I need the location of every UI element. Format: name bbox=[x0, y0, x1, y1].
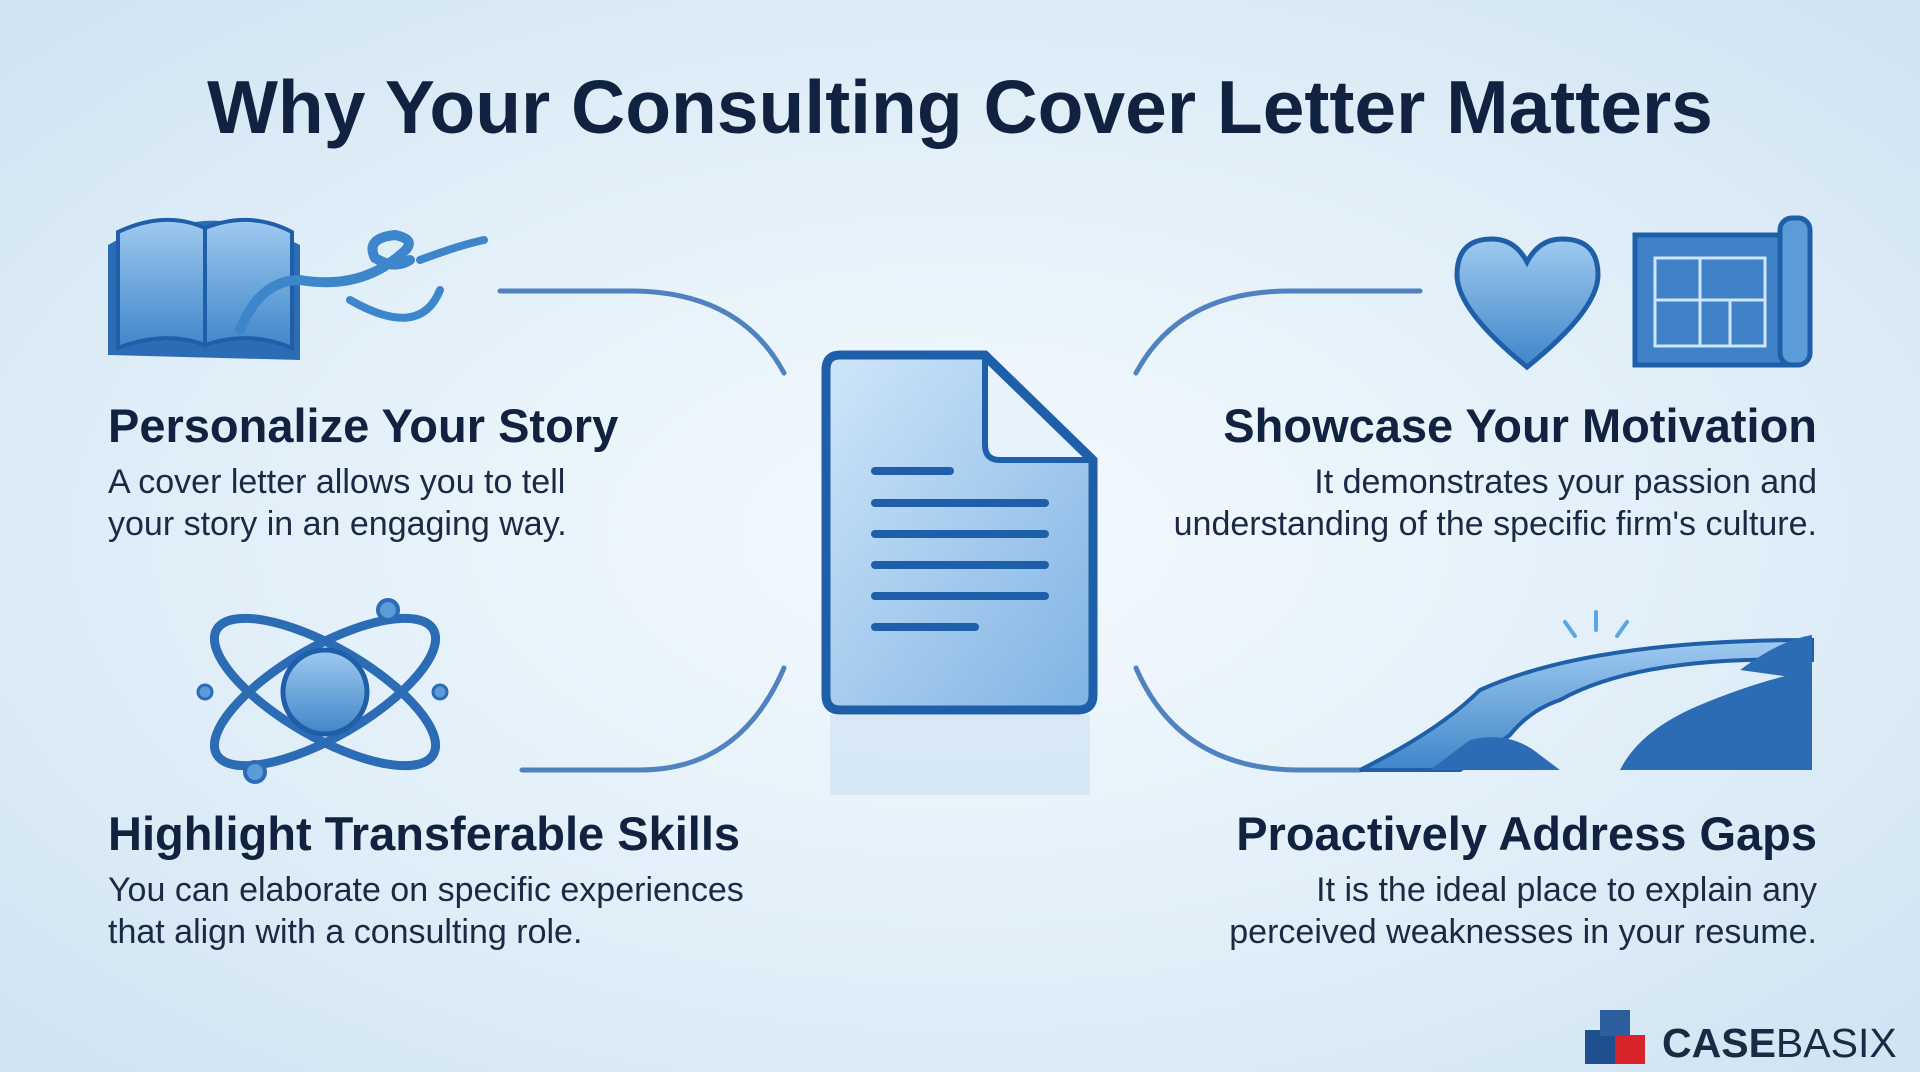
text block bbox=[1174, 463, 1817, 543]
text block: You can elaborate on specific experiences bbox=[108, 871, 744, 909]
text block: perceived weaknesses in your resume. bbox=[1229, 913, 1817, 951]
panel: motivation bbox=[1174, 399, 1817, 543]
icon: heart bbox=[1457, 239, 1598, 367]
icon: atom bbox=[194, 591, 456, 793]
heading: Proactively Address Gaps bbox=[1236, 807, 1817, 860]
text block: It demonstrates your passion and bbox=[1314, 463, 1817, 501]
connector curves bbox=[500, 291, 1420, 770]
text block: your story in an engaging way. bbox=[108, 505, 567, 543]
text block bbox=[108, 463, 567, 543]
text block: understanding of the specific firm's culture. bbox=[1174, 505, 1817, 543]
heading: Highlight Transferable Skills bbox=[108, 807, 740, 860]
title: Why Your Consulting Cover Letter Matters bbox=[207, 65, 1713, 149]
panel: skills bbox=[108, 807, 744, 951]
text block: It is the ideal place to explain any bbox=[1316, 871, 1817, 909]
icon: document bbox=[826, 355, 1093, 795]
icon: blueprint bbox=[1635, 218, 1810, 365]
heading: Personalize Your Story bbox=[108, 399, 618, 452]
icon: book bbox=[108, 220, 484, 360]
text block bbox=[108, 871, 744, 951]
text block: that align with a consulting role. bbox=[108, 913, 582, 951]
panel: gaps bbox=[1229, 807, 1817, 951]
heading: Showcase Your Motivation bbox=[1223, 399, 1817, 452]
text block bbox=[1229, 871, 1817, 951]
panel: personalize bbox=[108, 399, 618, 543]
icon: bridge bbox=[1360, 612, 1812, 770]
logo icon: cubes bbox=[1585, 1010, 1645, 1064]
text block: A cover letter allows you to tell bbox=[108, 463, 565, 501]
logo text: CASEBASIX bbox=[1662, 1020, 1897, 1066]
